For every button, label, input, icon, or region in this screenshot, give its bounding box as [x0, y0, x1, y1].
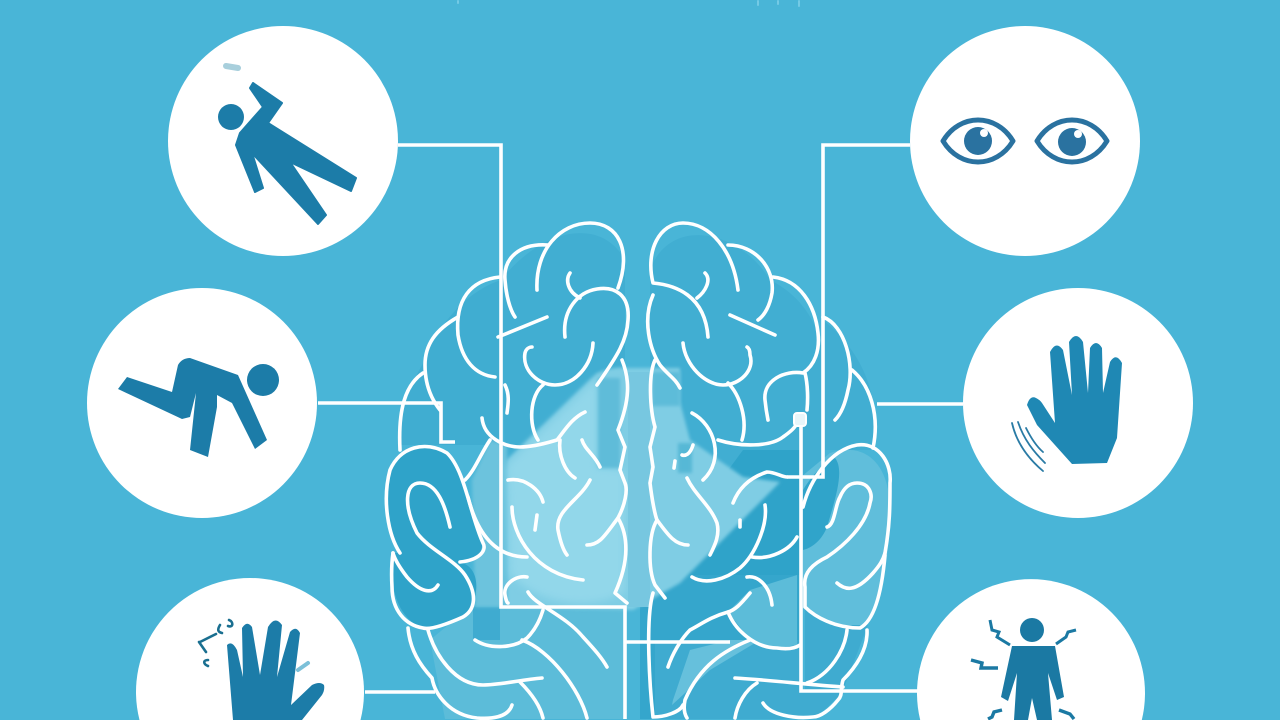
- left ear dark fill: [387, 447, 483, 628]
- panel: shaking hand circle: [136, 578, 364, 720]
- icon: person with lightning bolts: [971, 618, 1076, 720]
- left upper hemisphere folds: [400, 223, 628, 603]
- left lower hemisphere folds: [386, 440, 607, 718]
- panel: eyes circle: [910, 26, 1140, 256]
- icon: falling person: [218, 66, 356, 224]
- right upper hemisphere folds: [648, 223, 875, 598]
- panel: bent person circle: [87, 288, 317, 518]
- brain outline: [386, 223, 890, 718]
- icon: person bending over: [118, 358, 279, 457]
- panel: person with shocks circle: [917, 579, 1145, 720]
- dark block under central brain: [640, 450, 801, 607]
- brain tinted fills: [387, 233, 890, 719]
- central junction mark: [794, 413, 806, 426]
- right lower hemisphere folds: [649, 445, 890, 718]
- light central glow: [507, 368, 780, 610]
- right ear fill: [801, 450, 890, 628]
- panel: raised hand circle: [963, 288, 1193, 518]
- icon: pair of eyes: [943, 120, 1107, 162]
- connector lines: [318, 145, 963, 719]
- faint marks at top edge: [458, 1, 799, 6]
- icon: hand with tremor marks: [199, 620, 324, 720]
- panel: falling person circle: [168, 26, 398, 256]
- icon: waving hand: [1012, 336, 1122, 471]
